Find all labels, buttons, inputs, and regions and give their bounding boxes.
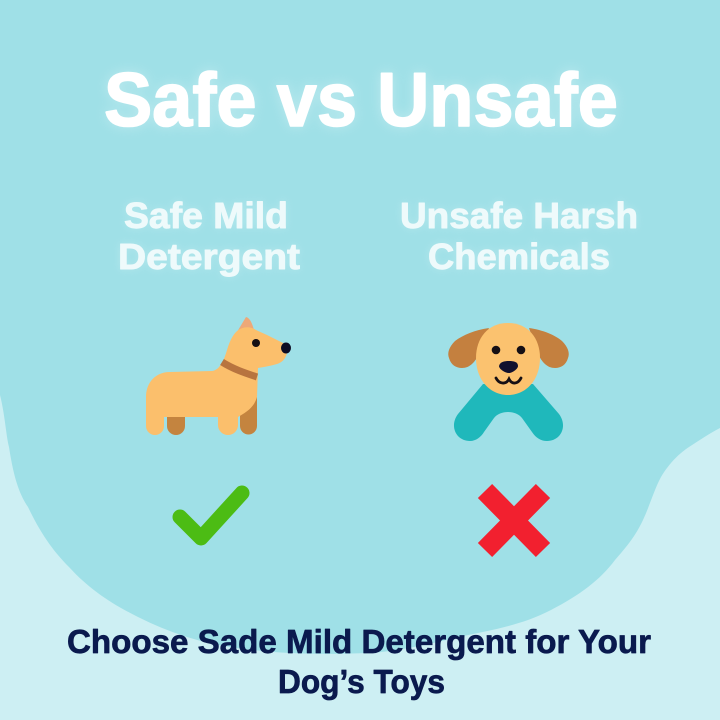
heading: safe mild detergent: Detergent: [118, 236, 300, 277]
heading: safe mild detergent: Safe Mild: [124, 195, 288, 236]
heading: unsafe harsh chemicals: Chemicals: [428, 236, 610, 277]
icon: red cross: [485, 491, 543, 550]
heading: unsafe harsh chemicals: [400, 195, 638, 277]
eyes: [492, 346, 500, 354]
collar: [222, 362, 257, 377]
footer message: Dog’s Toys: [278, 663, 445, 700]
mouth: [496, 378, 521, 383]
icon: green check mark: [180, 493, 242, 538]
heading: unsafe harsh chemicals: Unsafe Harsh: [400, 195, 638, 236]
footer message: Choose Sade Mild Detergent for Your: [67, 623, 651, 660]
head: [476, 323, 540, 395]
heading: unsafe harsh chemicals: Unsafe Harsh: [400, 195, 638, 236]
left ear: [448, 328, 489, 368]
eye: [252, 339, 260, 347]
heading: safe mild detergent: [118, 195, 300, 277]
right ear: [529, 328, 569, 368]
heading: safe mild detergent: Safe Mild: [124, 195, 288, 236]
nose: [281, 342, 291, 354]
icon: dog head with teal toy: [448, 323, 569, 441]
icon: standing dog: [146, 317, 291, 435]
teal toy: [454, 384, 563, 441]
nose: [499, 361, 518, 373]
footer message: [67, 623, 651, 700]
title: Safe vs Unsafe: [104, 58, 618, 143]
heading: unsafe harsh chemicals: Chemicals: [428, 236, 610, 277]
heading: safe mild detergent: Detergent: [118, 236, 300, 277]
title: Safe vs Unsafe: [104, 58, 618, 143]
